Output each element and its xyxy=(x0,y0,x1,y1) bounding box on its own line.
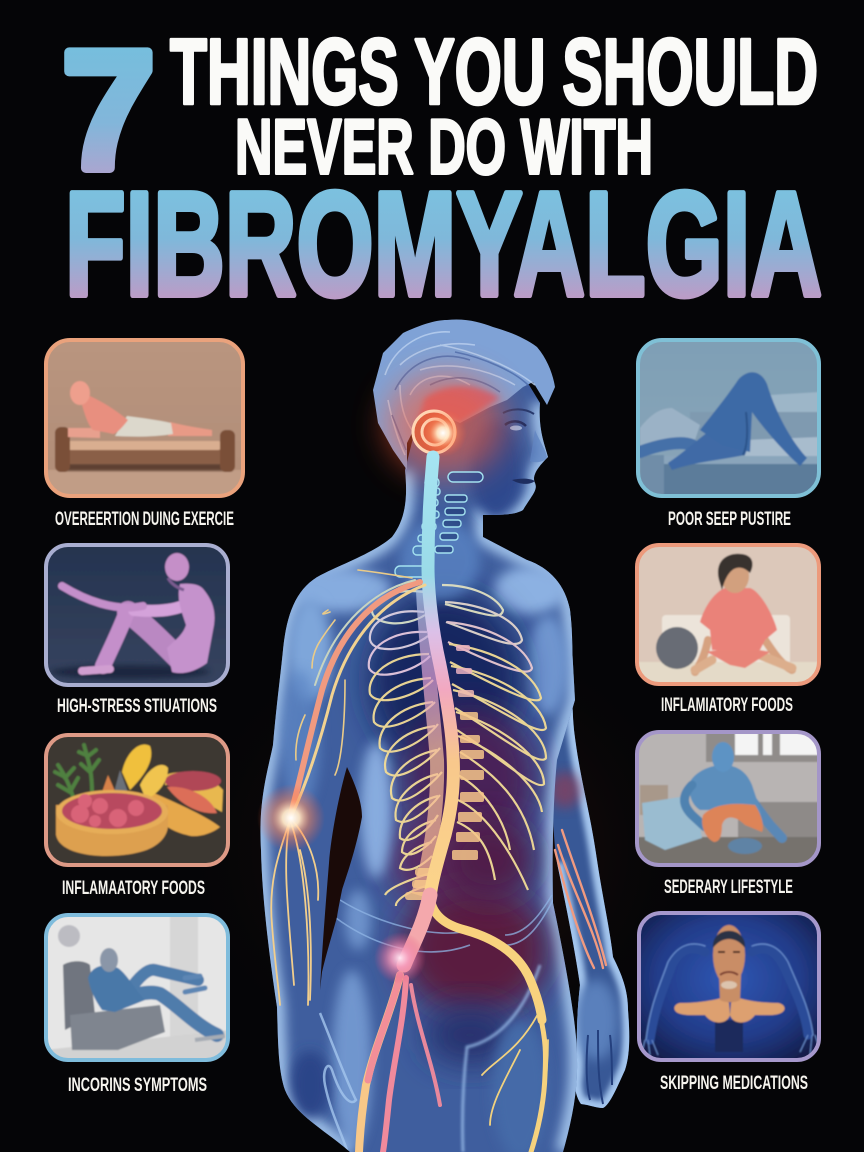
label: overexertion: OVEREERTION DUING EXERCIE xyxy=(55,509,234,530)
central anatomical figure xyxy=(258,320,630,1152)
shoulder highlights xyxy=(288,568,392,612)
label: inflammatory foods left: INFLAMAATORY FOODS xyxy=(62,878,205,899)
background glow xyxy=(180,620,700,1080)
thumb and hand lines xyxy=(320,1013,356,1150)
arm nerves xyxy=(271,570,606,1005)
panel: sedentary lifestyle xyxy=(635,730,823,867)
wrist pain glow xyxy=(257,784,325,852)
label: ignoring symptoms: INCORINS SYMPTOMS xyxy=(68,1075,207,1096)
waistband xyxy=(336,895,553,952)
leg highlights xyxy=(332,970,372,1150)
panel: inflammatory foods left xyxy=(44,733,230,867)
hip pain glow xyxy=(374,932,426,984)
panel: ignoring symptoms xyxy=(44,913,230,1062)
label: poor sleep posture: POOR SEEP PUSTIRE xyxy=(668,509,791,530)
hair xyxy=(373,319,555,470)
rib cage nerves xyxy=(369,585,546,906)
head pain glow xyxy=(385,373,505,477)
panel: overexertion during exercise xyxy=(44,338,245,498)
cervical vertebrae xyxy=(395,472,483,577)
spinal cord xyxy=(428,457,453,897)
leg dividing line xyxy=(462,965,540,1152)
sciatic nerve right branch xyxy=(430,897,545,1152)
title xyxy=(62,16,822,327)
title numeral 7: 7 xyxy=(62,16,155,204)
panel: high-stress situations xyxy=(44,543,230,687)
title line: never do with: NEVER DO WITH xyxy=(235,102,653,190)
chest shading xyxy=(369,592,521,768)
face features xyxy=(503,409,547,484)
face shading xyxy=(470,420,522,520)
panel: skipping medications xyxy=(637,911,821,1062)
panel: poor sleep posture xyxy=(636,338,821,498)
right arm xyxy=(527,560,630,1108)
label: high-stress: HIGH-STRESS STIUATIONS xyxy=(57,696,217,717)
nerve left branches xyxy=(359,895,548,1152)
gap between arm and torso xyxy=(320,767,362,990)
torso, head and left arm xyxy=(250,360,590,1152)
vertebral column xyxy=(405,590,484,900)
panel: inflammatory foods right xyxy=(635,543,821,686)
